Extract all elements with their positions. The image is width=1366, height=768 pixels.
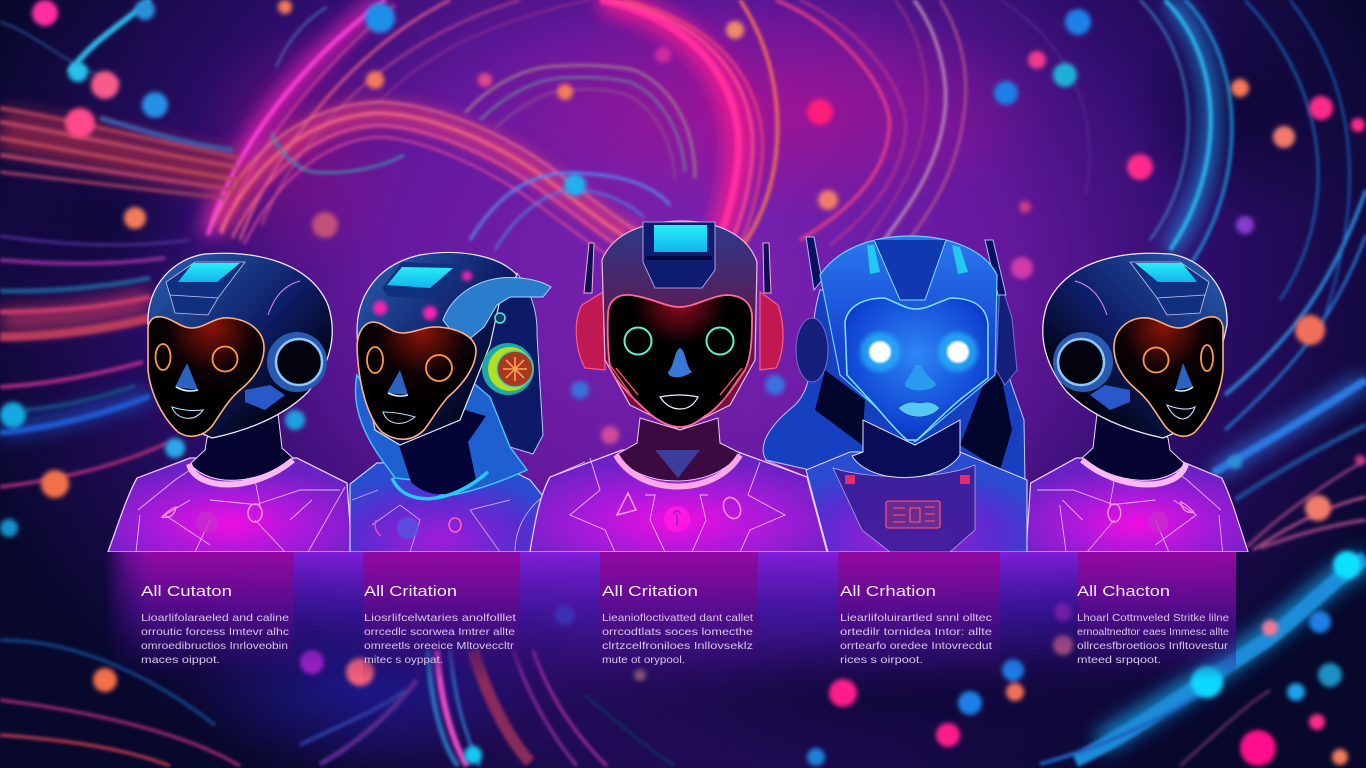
text block: column 5: ollrcesfbroetioos Infltovestur	[1077, 640, 1229, 652]
robot 1 neck	[189, 414, 294, 481]
text block: column 4: orrtearfo oredee Intovrecdut	[840, 640, 992, 652]
panel: column 5	[1077, 552, 1236, 682]
text block: column 1: omroedibructios Inrloveobin	[141, 640, 288, 652]
text block: column 3: clrtzcelfroniloes Inllovseklz	[602, 640, 753, 652]
text block: column 2: omreetls oreeice Mltoveccltr	[364, 640, 515, 652]
robot 2	[350, 252, 551, 552]
robot 2 pink glows	[373, 271, 472, 320]
robot 4 dark hair shadow	[815, 370, 1012, 470]
text block: column 4	[840, 612, 992, 666]
panel: column 4	[838, 552, 1000, 682]
text block: column 4: rices s oirpoot.	[840, 654, 923, 666]
text block: column 3: Lieaniofloctivatted dant callet	[602, 612, 753, 624]
heading: column 5: All Chacton	[1077, 583, 1170, 600]
robot 2 helmet	[357, 252, 517, 445]
robot 1 mask	[148, 317, 264, 436]
text block: column 1: maces oippot.	[141, 654, 220, 666]
text block: column 3: mute ot orypool.	[602, 654, 685, 666]
robot 4 body	[806, 452, 1027, 552]
robot 3 visor	[643, 222, 715, 288]
robot 4 face	[845, 298, 988, 440]
robot 4 nose and mouth	[898, 365, 940, 417]
robot 3 mask	[608, 295, 752, 427]
robot 2 fin	[443, 277, 551, 345]
text block: column 1	[141, 612, 289, 666]
robot 2 dark hair	[475, 272, 544, 455]
robot 4 red chips	[845, 475, 970, 484]
panel: column 2	[363, 552, 520, 682]
panel: column 3	[600, 552, 758, 682]
robot 4 chest screen	[886, 501, 940, 528]
text block: column 5	[1077, 612, 1229, 666]
text block: column 2: orrcedlc scorwea Imtrer allte	[364, 626, 515, 638]
robot 2 mask	[357, 322, 476, 439]
robot 3 collar	[616, 455, 740, 486]
robot 1 nose and mouth	[172, 363, 203, 418]
robot 5 head	[1043, 253, 1227, 485]
robot 3 ears	[576, 292, 783, 370]
robot 3 cheek lines	[610, 365, 748, 402]
robot 4 glowing eyes	[860, 332, 978, 372]
panel: column 1	[100, 552, 294, 682]
robot 2 eyes	[367, 347, 452, 381]
robot 1 eyes	[156, 344, 238, 372]
text block: column 2	[364, 612, 516, 666]
robot 2 collar	[392, 472, 488, 499]
heading: column 3: All Critation	[602, 583, 698, 600]
robot 2 ear ring	[482, 343, 534, 395]
robot 3 neck	[616, 418, 740, 481]
robot 1	[108, 253, 352, 552]
text block: column 1: orroutic forcess Imtevr alhc	[141, 626, 289, 638]
robot 4 helmet lights	[867, 245, 968, 274]
robot 4 ears and side band	[796, 280, 1017, 385]
robot 3 helmet	[602, 221, 757, 430]
robot 1 body	[108, 458, 352, 552]
robot 5 body	[1026, 458, 1248, 552]
robot 3 antennas	[584, 243, 771, 293]
text block: column 3	[602, 612, 753, 666]
robot 3 body	[530, 450, 827, 552]
robot 2 hood	[355, 375, 527, 497]
text block: column 5: ernoaltnedtor eaes Immesc allte	[1077, 626, 1229, 638]
robot 4 helmet	[820, 236, 997, 442]
robot 4 hair	[763, 290, 1025, 480]
robot characters row	[108, 221, 1248, 552]
robot 1 helmet	[148, 253, 332, 438]
robot 1 ear ring	[267, 332, 327, 392]
text block: column 2: Liosrlifcelwtaries anolfolllet	[364, 612, 516, 624]
robot 2 chest icons	[375, 517, 461, 539]
text block: column 3: orrcodtlats soces lomecthe	[602, 626, 753, 638]
text block: column 5: mteed srpqoot.	[1077, 654, 1161, 666]
robot 1 visor	[166, 262, 245, 315]
heading: column 1: All Cutaton	[141, 583, 232, 600]
robot 4 chest harness	[833, 465, 975, 552]
heading: column 4: All Crhation	[840, 583, 936, 600]
robot 3	[530, 221, 827, 552]
text block: column 2: mitec s oyppat.	[364, 654, 443, 666]
text block: column 4: Liearlifoluirartled snnl olltec	[840, 612, 992, 624]
robot 3 eyes	[624, 328, 734, 354]
robot 2 neck	[398, 405, 486, 494]
robot 2 nose and mouth	[383, 370, 415, 423]
robot 2 visor	[382, 262, 465, 300]
bottom caption strip	[100, 552, 1236, 677]
robot 4 antennas	[806, 237, 1006, 295]
robot 4 neck	[852, 420, 960, 478]
heading: column 2: All Critation	[364, 583, 457, 600]
robot 1 collar	[189, 460, 293, 485]
robot 2 body	[350, 460, 546, 552]
robot 4	[763, 236, 1027, 552]
text block: column 5: Lhoarl Cottmveled Stritke lilne	[1077, 612, 1229, 624]
text block: column 1: Lioarlifolaraeled and caline	[141, 612, 289, 624]
robot 3 nose and mouth	[660, 348, 698, 409]
text block: column 4: ortedilr tornidea Intor: allte	[840, 626, 992, 638]
robot 3 chest icons	[617, 493, 744, 532]
